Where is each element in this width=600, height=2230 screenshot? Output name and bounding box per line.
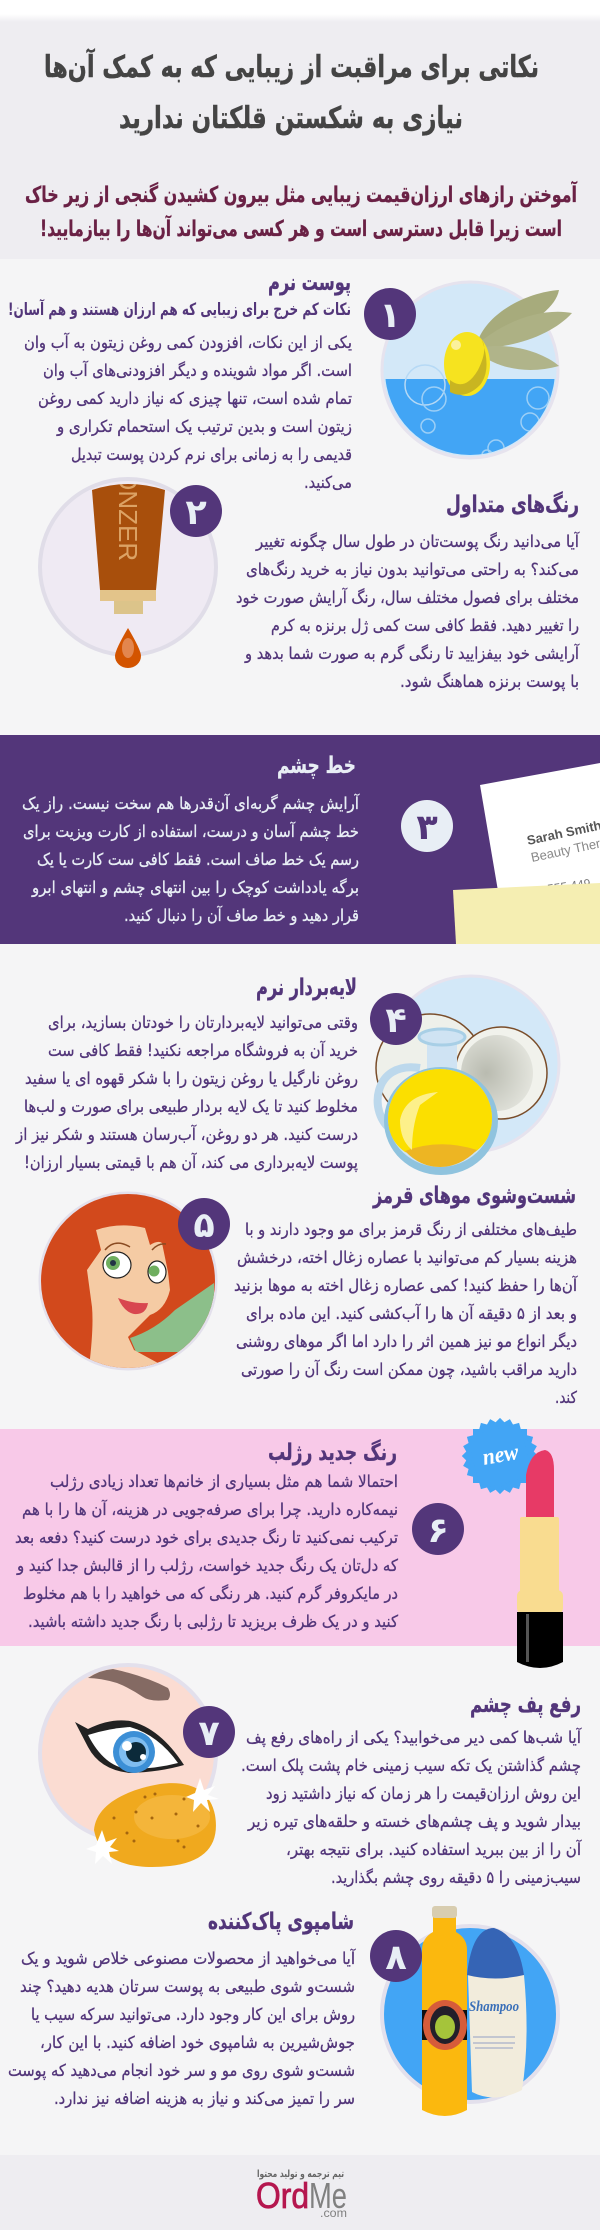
subheading: نکات کم خرج برای زیبایی که هم ارزان هستند و هم آسان! bbox=[8, 298, 351, 320]
body text: با پوست برنزه هماهنگ شود. bbox=[400, 672, 579, 692]
body text: سیب‌زمینی را ۵ دقیقه روی چشم بگذارید. bbox=[331, 1868, 581, 1888]
icon: new badge bbox=[462, 1418, 538, 1494]
body text: قدیمی را به زمانی برای نرم کردن پوست تبدیل bbox=[71, 445, 352, 465]
body text: ترکیب نمی‌کنید تا رنگ جدیدی برای خود درست کنید؟ دفعه بعد bbox=[15, 1528, 398, 1548]
number badge 6 bbox=[412, 1503, 464, 1555]
body text: است. اگر مواد شوینده و دیگر افزودنی‌های آب وان bbox=[43, 361, 352, 381]
icon: business card: 555 449 bbox=[546, 876, 592, 896]
heading: لایه‌بردار نرم bbox=[256, 975, 357, 1001]
body text: آیا شب‌ها کمی دیر می‌خوابید؟ یکی از راه‌های رفع پف bbox=[246, 1728, 582, 1748]
icon: bronzer tube: BRONZER bbox=[113, 434, 143, 561]
panel: tip 5 red hair wash bbox=[40, 1183, 578, 1407]
panel: header bbox=[0, 14, 600, 259]
footer caption: تیم ترجمه و تولید محتوا bbox=[257, 2169, 344, 2180]
number badge 4: ۴ bbox=[385, 1001, 407, 1041]
body text: آرایش چشم گربه‌ای آن‌قدرها هم سخت نیست. راز یک bbox=[22, 794, 360, 814]
body text bbox=[24, 333, 352, 492]
body text: قرار دهید و خط صاف آن را دنبال کنید. bbox=[124, 906, 359, 926]
body text: و بعد از ۵ دقیقه آن ها را آب‌کشی کنید. این ماده برای bbox=[246, 1304, 577, 1324]
icon: vinegar bottle and shampoo bbox=[382, 1906, 558, 2116]
panel: tip 3 eyeliner bbox=[0, 735, 600, 944]
title bbox=[44, 48, 539, 136]
subtitle bbox=[25, 180, 577, 242]
logo: OrdMe: Ord bbox=[256, 2175, 309, 2216]
logo: OrdMe: Me bbox=[309, 2175, 347, 2216]
logo: OrdMe: .com bbox=[320, 2206, 347, 2220]
body text: وقتی می‌توانید لایه‌بردارتان را خودتان بسازید، برای bbox=[48, 1013, 358, 1033]
panel: tip 6 new lipstick colour bbox=[0, 1418, 600, 1668]
number badge 5: ۵ bbox=[193, 1206, 215, 1246]
panel: tip 2 shades bbox=[38, 477, 580, 692]
panel: tip 8 cleansing shampoo bbox=[8, 1906, 558, 2116]
body text: جوش‌شیرین به شامپوی خود اضافه کنید. با این کار، bbox=[40, 2033, 355, 2053]
number badge 2: ۲ bbox=[185, 493, 207, 533]
body text: در مایکروفر گرم کنید. هر رنگی که می خواهید را با هم مخلوط bbox=[23, 1584, 398, 1604]
body text: که دل‌تان یک رنگ جدید خواست، رژلب را از قالبش جدا کنید و bbox=[16, 1556, 398, 1576]
body text: خط چشم آسان و درست، استفاده از کارت ویزیت برای bbox=[23, 822, 359, 842]
number badge 3: ۳ bbox=[416, 808, 438, 848]
body text: نیمه‌کاره دارید. چرا برای صرفه‌جویی در هزینه، آن ها را با هم bbox=[22, 1500, 398, 1520]
number badge 6: ۶ bbox=[427, 1511, 449, 1551]
body text: شست‌و شوی روی مو و سر خود انجام می‌دهید که پوست bbox=[8, 2061, 355, 2081]
body text: سر را تمیز می‌کند و نیاز به هزینه اضافه نیز ندارد. bbox=[54, 2089, 355, 2109]
panel: tip 7 puffy eyes bbox=[40, 1665, 582, 1888]
number badge 7 bbox=[183, 1706, 235, 1758]
body text: می‌کنید. bbox=[304, 473, 352, 492]
body text bbox=[241, 1728, 582, 1888]
logo: OrdMe bbox=[256, 2175, 347, 2220]
icon: bronzer tube bbox=[38, 477, 218, 668]
title: نیازی به شکستن قلکتان ندارید bbox=[119, 101, 463, 136]
icon: red-haired woman bbox=[40, 1190, 220, 1375]
icon: vinegar bottle and shampoo: Shampoo bbox=[469, 1999, 519, 2015]
number badge 1 bbox=[364, 288, 416, 340]
number badge 2 bbox=[170, 485, 222, 537]
icon: coconut and oil bottle bbox=[376, 976, 559, 1175]
body text: خرید آن به فروشگاه مراجعه نکنید! فقط کافی ست bbox=[48, 1041, 358, 1061]
body text: روش برای این کار وجود دارد. می‌توانید سرکه سیب یا bbox=[31, 2005, 355, 2025]
body text: برگه یادداشت کوچک را بین انتهای چشم و انتهای ابرو bbox=[31, 878, 359, 898]
icon: eye and potato bbox=[40, 1665, 219, 1867]
number badge 5 bbox=[178, 1198, 230, 1250]
body text: درست کنید. هر دو روغن، آب‌رسان هستند و شکر نیز از bbox=[15, 1125, 358, 1145]
body text: آیا می‌خواهید از محصولات مصنوعی خلاص شوید و یک bbox=[21, 1949, 356, 1969]
body text: تمام شده است، تنها چیزی که نیاز دارید کمی روغن bbox=[38, 389, 352, 409]
icon: lipstick bbox=[517, 1450, 563, 1668]
heading: پوست نرم bbox=[268, 270, 351, 296]
body text: کند. bbox=[555, 1388, 577, 1407]
body text: آیا می‌دانید رنگ پوست‌تان در طول سال چگونه تغییر bbox=[255, 532, 580, 552]
body text: می‌کند؟ به راحتی می‌توانید بدون نیاز به خرید رنگ‌های bbox=[246, 560, 579, 580]
body text bbox=[22, 794, 360, 926]
body text: پوست لایه‌برداری می کند، آن هم با قیمتی بسیار ارزان! bbox=[24, 1153, 358, 1173]
icon: new badge: new bbox=[481, 1439, 521, 1470]
number badge 8 bbox=[370, 1930, 422, 1982]
body text bbox=[234, 1220, 578, 1407]
body text: یکی از این نکات، افزودن کمی روغن زیتون به آب وان bbox=[24, 333, 352, 353]
body text: بیدار شوید و پف چشم‌های خسته و حلقه‌های تیره زیر bbox=[247, 1812, 581, 1832]
body text bbox=[15, 1013, 358, 1173]
body text bbox=[8, 1949, 356, 2109]
number badge 3 bbox=[401, 800, 453, 852]
panel: footer bbox=[0, 2155, 600, 2230]
body text bbox=[15, 1472, 398, 1632]
body text: روغن نارگیل یا روغن زیتون را با شکر قهوه ای یا سفید bbox=[25, 1069, 358, 1089]
number badge 8: ۸ bbox=[385, 1938, 407, 1978]
body text: کنید و در یک ظرف بریزید تا رژلبی با رنگ جدید داشته باشید. bbox=[28, 1612, 398, 1632]
heading: خط چشم bbox=[277, 753, 356, 779]
panel: tip 1 soft skin bbox=[8, 270, 572, 492]
body text: رسم یک خط صاف است. فقط کافی ست کارت یا یک bbox=[37, 850, 359, 870]
number badge 1: ۱ bbox=[379, 296, 401, 336]
number badge 7: ۷ bbox=[198, 1714, 220, 1754]
icon: business card bbox=[453, 763, 600, 944]
heading: شامپوی پاک‌کننده bbox=[208, 1909, 354, 1935]
body text: شست‌و شوی طبیعی به پوست سرتان هدیه دهید؟ چند bbox=[20, 1977, 355, 1997]
body text: زیتون است و بدین ترتیب یک استحمام تکراری و bbox=[56, 417, 352, 437]
body text: مخلوط کنید تا یک لایه بردار طبیعی برای صورت و لب‌ها bbox=[24, 1097, 358, 1117]
heading: رنگ جدید رژلب bbox=[268, 1439, 397, 1466]
number badge 4 bbox=[370, 993, 422, 1045]
body text: احتمالا شما هم مثل بسیاری از خانم‌ها تعداد زیادی رژلب bbox=[50, 1472, 398, 1492]
icon: olive in water bbox=[380, 280, 572, 460]
panel: tip 4 exfoliant bbox=[15, 975, 559, 1175]
body text bbox=[236, 532, 580, 692]
